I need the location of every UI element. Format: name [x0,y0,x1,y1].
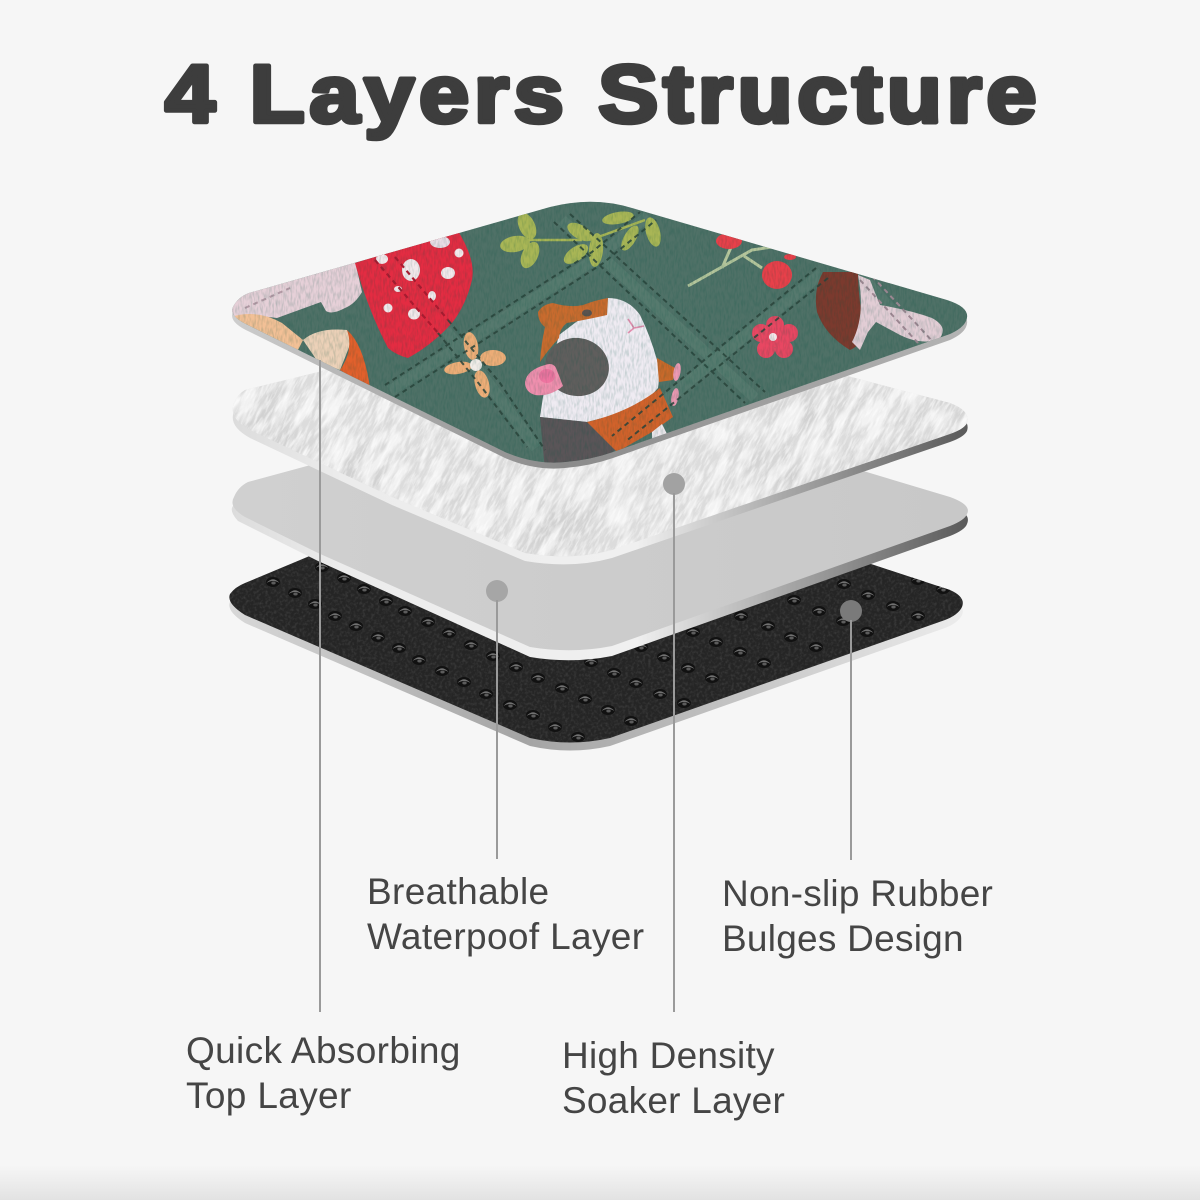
cream and orange mushroom [303,329,370,388]
label: non-slip rubber bulges: Non-slip Rubber [722,873,993,914]
marker and leader line: waterproof layer [486,580,508,859]
layer 1: printed quick absorbing top layer [225,195,975,470]
red berry branch [688,233,796,289]
mauve stitches on pink stem [245,288,290,308]
pink flower [752,316,798,358]
peach shape, left [234,314,303,350]
pink mushroom stem, left [232,262,362,318]
label: high density soaker layer: Soaker Layer [562,1080,785,1121]
label: quick absorbing top layer: Quick Absorbing [186,1030,461,1071]
quilting ridges [385,216,925,448]
top layer side edge [232,213,967,469]
label: non-slip rubber bulges: Bulges Design [722,918,964,959]
rubber bulges [266,562,950,742]
guinea pig [525,298,682,470]
layer 4: black non-slip rubber layer [229,556,963,750]
red stitches over mushroom [375,257,448,333]
label: quick absorbing top layer: Top Layer [186,1075,352,1116]
leader line: top layer [319,360,321,1012]
label: breathable waterproof layer: Waterpoof Layer [367,916,644,957]
title: 4 Layers Structure [165,49,1041,140]
red mushroom cap with white dots [355,231,473,358]
olive leaf sprigs [499,209,664,271]
label: breathable waterproof layer: Breathable [367,871,549,912]
mauve stitches on brown mushroom stem [860,276,934,343]
fabric weave texture [225,195,975,470]
layer 3: grey breathable waterproof layer [232,392,968,660]
label: high density soaker layer: High Density [562,1035,775,1076]
orange flower [443,331,506,399]
brown mushroom, right [816,272,943,350]
quilting stitches [385,212,828,450]
marker and leader line: rubber layer [840,600,862,860]
marker and leader line: soaker layer [663,473,685,1012]
layer 2: white high density soaker layer [232,370,968,564]
